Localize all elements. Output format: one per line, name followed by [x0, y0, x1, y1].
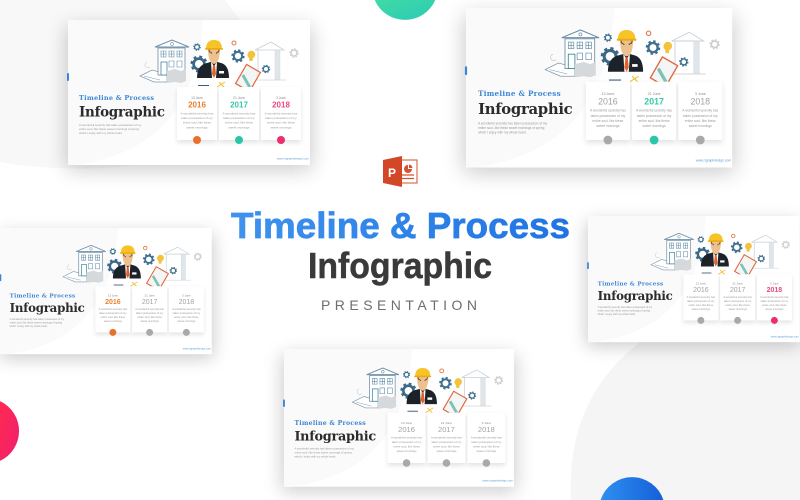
card 2016: A wonderful serenity has — [181, 111, 214, 115]
card 2016: 13 June — [601, 92, 614, 96]
card shadows — [95, 288, 204, 335]
footer url: www.rrgraphdesign.com — [771, 334, 799, 338]
card 2017: 2017 — [730, 287, 746, 294]
card 2016 — [586, 82, 630, 144]
paragraph: A wonderful serenity has taken possession of my — [598, 306, 653, 309]
decorative circle: blue bottom — [601, 477, 663, 500]
card 2016: entire soul, like these — [183, 121, 211, 125]
card 2017 — [132, 286, 167, 336]
card 2017: 2017 — [142, 299, 158, 306]
card shadows — [586, 84, 722, 143]
card 2017: 21 June — [733, 282, 743, 286]
card 2017: sweet mornings — [728, 307, 747, 311]
card 2018 — [261, 87, 301, 144]
card 2017: taken possession of my — [136, 311, 164, 315]
slide 2 — [464, 8, 734, 173]
paragraph: A wonderful serenity has taken possession of my — [10, 318, 65, 321]
card 2016: A wonderful serenity has — [687, 295, 716, 299]
card 2017: A wonderful serenity has — [636, 109, 672, 113]
decorative circle: red left — [0, 401, 19, 461]
card 2018: taken possession of my — [683, 114, 718, 118]
card 2018: 3 June — [482, 421, 491, 425]
card 2017: A wonderful serenity has — [431, 436, 463, 440]
card 2018: 3 June — [182, 294, 191, 298]
card 2016: taken possession of my — [99, 311, 127, 315]
card 2018: 2018 — [179, 299, 194, 306]
card 2016: 2016 — [188, 100, 206, 110]
footer url: www.rrgraphdesign.com — [277, 156, 309, 160]
slide shadow — [66, 26, 312, 170]
title: Infographic — [294, 430, 376, 445]
card 2016: taken possession of my — [687, 299, 715, 303]
paragraph: entire soul, like these sweet mornings of spring — [10, 322, 63, 325]
card 2018: A wonderful serenity has — [682, 109, 719, 113]
card 2018 — [678, 82, 722, 144]
card shadows — [388, 415, 505, 466]
presentation label: PRESENTATION — [321, 297, 477, 313]
card 2016 — [95, 286, 130, 336]
card 2018: taken possession of my — [761, 299, 789, 303]
paragraph — [478, 122, 547, 134]
card 2018: sweet mornings — [765, 307, 784, 311]
side marker — [283, 399, 285, 407]
card 2017: sweet mornings — [643, 124, 666, 128]
card 2018 — [467, 413, 505, 467]
paragraph: A wonderful serenity has taken possession of my — [79, 123, 142, 127]
card 2016: 2016 — [598, 96, 618, 106]
card 2017: taken possession of my — [724, 299, 752, 303]
slide swoosh — [588, 216, 706, 342]
card 2018: 2018 — [272, 100, 290, 110]
card 2018: 3 June — [770, 282, 779, 286]
card 2017 — [720, 274, 755, 324]
illustration — [352, 368, 503, 417]
slide swoosh — [0, 228, 118, 354]
card 2016: entire soul, like these — [393, 445, 420, 449]
card 2018: taken possession of my — [173, 311, 201, 315]
card 2017: taken possession of my — [637, 114, 672, 118]
card 2018 — [757, 274, 792, 324]
card 2018: 2018 — [478, 425, 495, 434]
icon: PowerPoint — [383, 156, 417, 187]
card 2018: A wonderful serenity has — [760, 295, 789, 299]
card 2016: 13 June — [191, 96, 203, 100]
card 2016 — [177, 87, 217, 144]
card shadows — [683, 276, 792, 323]
heading: Timeline & Process — [294, 420, 366, 427]
heading: Timeline & Process — [598, 282, 663, 288]
card 2016: 13 June — [108, 294, 118, 298]
slide shadow — [0, 233, 214, 358]
slide background — [284, 349, 514, 487]
card 2016 — [388, 413, 426, 467]
paragraph: A wonderful serenity has taken possession of my — [478, 122, 547, 126]
card 2017: 21 June — [233, 96, 245, 100]
paragraph: which I enjoy with my whole heart. — [478, 130, 527, 134]
slide 1 — [66, 20, 312, 170]
card 2018: entire soul, like these — [267, 121, 295, 125]
card 2018: 3 June — [695, 92, 706, 96]
card 2018: sweet mornings — [270, 125, 292, 129]
heading: Timeline & Process — [10, 294, 75, 300]
illustration — [63, 245, 201, 290]
card 2018: sweet mornings — [177, 319, 196, 323]
paragraph: entire soul, like these sweet mornings of spring — [79, 127, 139, 131]
main heading: Timeline & Process — [231, 205, 570, 246]
paragraph: entire soul, like these sweet mornings of spring — [478, 126, 545, 130]
title: Infographic — [79, 104, 165, 120]
paragraph: which I enjoy with my whole heart. — [294, 454, 336, 458]
card 2016: A wonderful serenity has — [590, 109, 626, 113]
card 2016: taken possession of my — [591, 114, 625, 118]
side marker — [587, 262, 589, 269]
card 2017: 21 June — [441, 421, 452, 425]
paragraph: entire soul, like these sweet mornings of spring — [598, 310, 651, 313]
card 2016: A wonderful serenity has — [99, 307, 128, 311]
card 2017: sweet mornings — [140, 319, 159, 323]
card 2017: 2017 — [230, 100, 248, 110]
slide shadow — [282, 355, 516, 492]
illustration — [140, 40, 298, 92]
slide background — [466, 8, 732, 168]
card 2018: taken possession of my — [265, 116, 297, 120]
side marker — [465, 66, 467, 75]
footer url: www.rrgraphdesign.com — [482, 479, 514, 483]
card 2018: sweet mornings — [689, 124, 712, 128]
footer url: www.rrgraphdesign.com — [183, 346, 211, 350]
card 2018: entire soul, like these — [762, 303, 787, 307]
paragraph — [598, 306, 653, 316]
card 2017: entire soul, like these — [225, 121, 253, 125]
card 2018: A wonderful serenity has — [172, 307, 201, 311]
paragraph: which I enjoy with my whole heart. — [10, 325, 48, 328]
paragraph — [79, 123, 142, 135]
card 2016: sweet mornings — [596, 124, 620, 128]
heading: Timeline & Process — [478, 89, 561, 98]
card 2017: 21 June — [145, 294, 155, 298]
card 2016: 2016 — [398, 425, 415, 434]
card 2017 — [219, 87, 259, 144]
paragraph: which I enjoy with my whole heart. — [79, 131, 123, 135]
card 2017: 21 June — [648, 92, 661, 96]
card 2016: 13 June — [401, 421, 412, 425]
card shadows — [177, 89, 301, 143]
slide swoosh — [68, 20, 203, 165]
card 2017: taken possession of my — [432, 440, 462, 444]
card 2017 — [632, 82, 676, 144]
card 2017: entire soul, like these — [433, 445, 460, 449]
paragraph: A wonderful serenity has taken possession of my — [294, 447, 355, 451]
card 2017: 2017 — [438, 425, 455, 434]
card 2018: taken possession of my — [471, 440, 502, 444]
paragraph — [294, 447, 355, 458]
card 2016 — [683, 274, 718, 324]
card 2016: sweet mornings — [186, 125, 208, 129]
paragraph — [10, 318, 65, 328]
card 2016: entire soul, like these — [592, 119, 624, 123]
card 2018: entire soul, like these — [473, 445, 500, 449]
slide background — [588, 216, 800, 342]
side marker — [0, 274, 1, 281]
main subheading: Infographic — [308, 245, 492, 286]
slide 3 — [0, 228, 214, 358]
slide shadow — [586, 221, 800, 346]
card 2018: A wonderful serenity has — [471, 436, 502, 440]
card 2017: A wonderful serenity has — [223, 111, 256, 115]
card 2018: 3 June — [276, 96, 286, 100]
card 2016: taken possession of my — [181, 116, 213, 120]
card 2017: taken possession of my — [223, 116, 255, 120]
card 2016: 2016 — [693, 287, 709, 294]
card 2016: 13 June — [696, 282, 706, 286]
title: Infographic — [598, 289, 673, 303]
slide 4 — [586, 216, 800, 346]
card 2017: sweet mornings — [228, 125, 250, 129]
heading: Timeline & Process — [79, 94, 154, 102]
slide shadow — [464, 15, 734, 173]
card 2018: sweet mornings — [476, 449, 497, 453]
illustration — [545, 30, 719, 87]
slide swoosh — [466, 8, 614, 168]
card 2016: sweet mornings — [104, 319, 123, 323]
card 2016: sweet mornings — [692, 307, 711, 311]
card 2017: entire soul, like these — [725, 303, 750, 307]
card 2016: A wonderful serenity has — [391, 436, 423, 440]
card 2016: sweet mornings — [397, 449, 417, 453]
card 2017: entire soul, like these — [137, 315, 162, 319]
title: Infographic — [478, 100, 573, 118]
title: Infographic — [10, 301, 85, 315]
card 2018: 2018 — [691, 96, 710, 106]
illustration — [651, 233, 789, 278]
slide background — [68, 20, 310, 165]
paragraph: which I enjoy with my whole heart. — [598, 313, 636, 316]
card 2016: taken possession of my — [392, 440, 422, 444]
footer url: www.rrgraphdesign.com — [696, 158, 731, 162]
card 2016: entire soul, like these — [101, 315, 126, 319]
slide 5 — [282, 349, 516, 492]
card 2016: 2016 — [105, 299, 121, 306]
card 2018: entire soul, like these — [685, 119, 716, 123]
card 2018: 2018 — [767, 287, 782, 294]
card 2017: A wonderful serenity has — [723, 295, 753, 299]
card 2017: 2017 — [644, 96, 664, 106]
decorative circle: teal top — [375, 0, 435, 20]
card 2018: entire soul, like these — [174, 315, 199, 319]
card 2017: entire soul, like these — [639, 119, 670, 123]
card 2018: A wonderful serenity has — [265, 111, 298, 115]
side marker — [67, 73, 69, 81]
card 2017: A wonderful serenity has — [135, 307, 165, 311]
card 2017: sweet mornings — [436, 449, 457, 453]
paragraph: entire soul, like these sweet mornings of spring — [294, 451, 352, 455]
card 2017 — [427, 413, 465, 467]
card 2016: entire soul, like these — [689, 303, 714, 307]
icon: PowerPoint: P — [388, 166, 396, 180]
card 2018 — [169, 286, 204, 336]
slide background — [0, 228, 212, 354]
slide swoosh — [284, 349, 412, 487]
